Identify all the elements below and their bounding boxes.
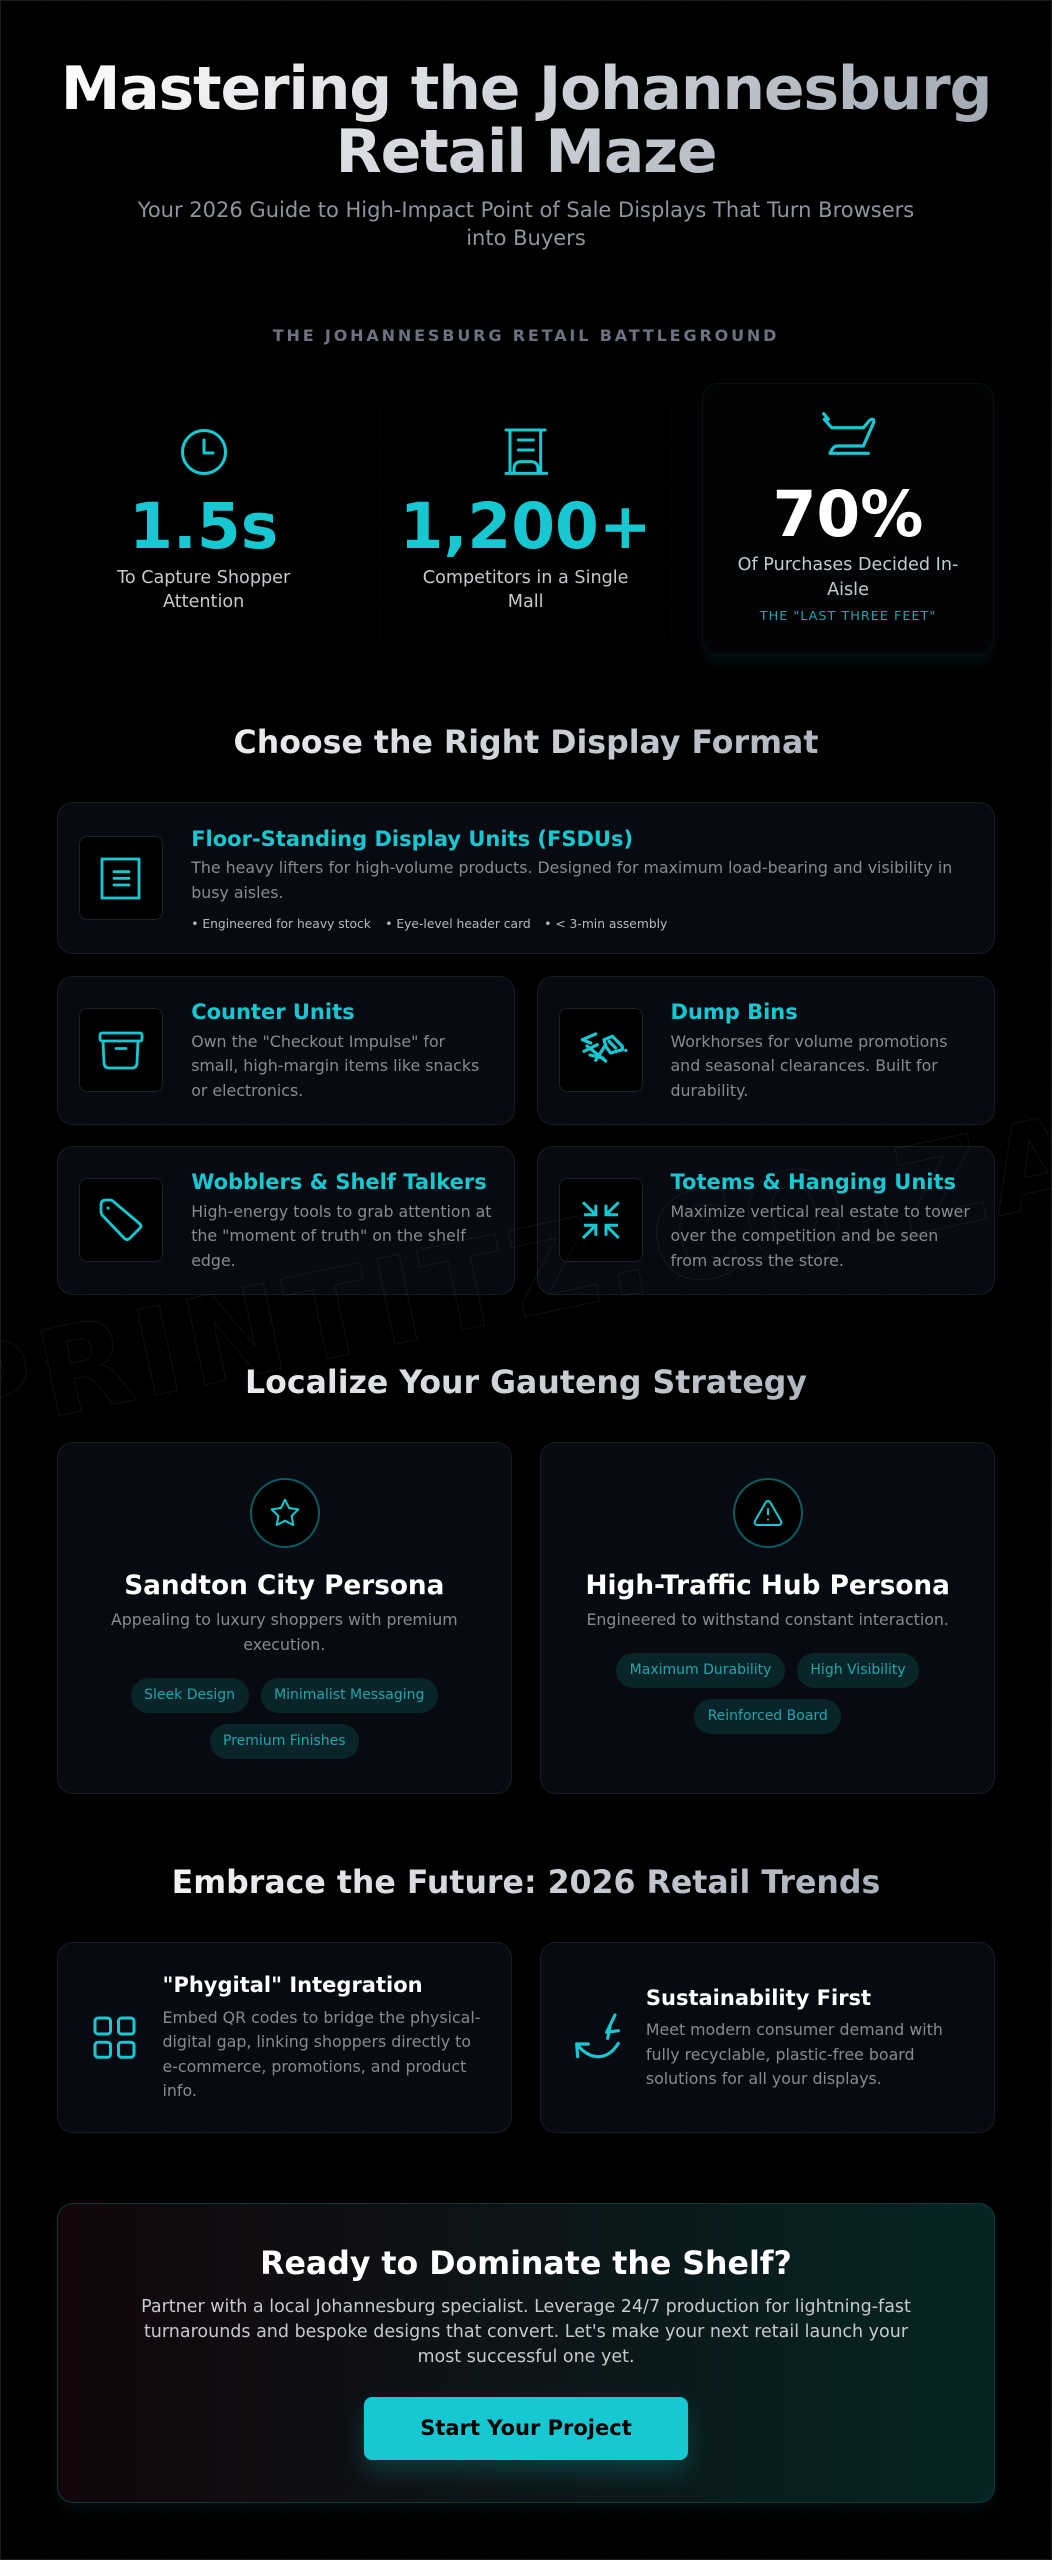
panel: stat 1,200+ [379,383,672,655]
card text [162,2008,480,2100]
persona text: Appealing to luxury shoppers with premium [111,1610,458,1629]
icon: shopping basket [822,412,876,455]
card text: from across the store. [670,1251,844,1270]
title [57,58,995,184]
panel: totems [536,1146,994,1294]
tags row 2: Premium Finishes [223,1733,346,1749]
tags row 1: Sleek Design [144,1687,235,1703]
persona title: Sandton City Persona [124,1570,444,1600]
feature bullets [191,917,667,931]
panel: stat 1.5s [57,383,350,655]
cta button: Start Your Project [420,2416,632,2440]
cta text: Partner with a local Johannesburg specialist. Leverage 24/7 production for lightning-fast [141,2297,911,2317]
card text: edge. [191,1251,236,1270]
card title: Sustainability First [646,1986,871,2010]
subtitle [138,198,914,250]
card text: Own the "Checkout Impulse" for [191,1032,445,1051]
persona text [111,1610,458,1654]
tags row 1: High Visibility [810,1662,906,1678]
card text: e-commerce, promotions, and product [162,2057,466,2076]
stat label: Mall [508,592,544,612]
card text: durability. [670,1081,748,1100]
cta text: turnarounds and bespoke designs that convert. Let's make your next retail launch your [144,2322,908,2342]
persona title: High-Traffic Hub Persona [585,1570,950,1600]
cta button [364,2397,688,2460]
card text: busy aisles. [191,883,284,902]
card title: Wobblers & Shelf Talkers [191,1170,487,1194]
stat label [738,555,958,600]
cta text [141,2297,911,2367]
icon: document display [79,836,163,920]
stat label [423,568,628,612]
card title: Totems & Hanging Units [670,1170,956,1194]
subtitle: Your 2026 Guide to High-Impact Point of Sale Displays That Turn Browsers [138,198,914,222]
section label: battleground: THE JOHANNESBURG RETAIL BATTLEGROUND [273,326,779,345]
icon: warning badge [733,1478,803,1548]
heading: display format: Choose the Right Display Format [234,725,818,761]
heading: trends [57,1863,995,1903]
panel: counter units [57,976,515,1124]
card text: small, high-margin items like snacks [191,1056,479,1075]
icon: recycle arrow [575,2013,620,2058]
title: Retail Maze [336,117,716,187]
tags row 1: Maximum Durability [630,1662,771,1678]
icon: clock [181,429,227,475]
card text: the "moment of truth" on the shelf [191,1226,466,1245]
card text: over the competition and be seen [670,1226,938,1245]
stat label: Of Purchases Decided In- [738,555,958,575]
cta heading: Ready to Dominate the Shelf? [260,2246,792,2282]
card text: info. [162,2081,197,2100]
stat label: Attention [163,592,244,612]
subtitle: into Buyers [466,226,586,250]
persona text: execution. [243,1635,325,1654]
panel: high-traffic persona [540,1442,995,1794]
feature bullets: • Eye-level header card [385,917,531,931]
feature bullets: • Engineered for heavy stock [191,917,371,931]
heading: display format [57,723,995,763]
panel: wobblers [57,1146,515,1294]
panel: Sandton City persona [57,1442,512,1794]
card text: Workhorses for volume promotions [670,1032,948,1051]
stat number: 1,200+ [400,490,652,563]
persona text: Engineered to withstand constant interaction. [586,1610,949,1629]
card text: The heavy lifters for high-volume products. Designed for maximum load-bearing and visibility in [191,858,952,877]
icon: four-square grid [94,2016,136,2059]
card text [191,1032,479,1100]
panel: call to action [57,2203,995,2502]
cta text: most successful one yet. [417,2347,635,2367]
card title: Dump Bins [670,1000,798,1024]
card text: Meet modern consumer demand with [646,2020,943,2039]
tags row 1 [616,1653,919,1688]
icon: inward arrows [558,1178,642,1262]
stat tag: THE "LAST THREE FEET" [760,609,936,624]
panel: phygital [57,1942,512,2132]
stat number: 1.5s [129,490,278,563]
panel: stat 70% highlighted [702,383,994,655]
card title: Floor-Standing Display Units (FSDUs) [191,827,633,851]
card text [670,1032,948,1100]
stat label: Aisle [827,580,869,600]
stat label: Competitors in a Single [423,568,628,588]
icon: dump bin [558,1008,642,1092]
panel: floor-standing display units [57,802,995,954]
card text: Maximize vertical real estate to tower [670,1202,970,1221]
heading: strategy [57,1363,995,1403]
title: Mastering the Johannesburg [61,54,991,124]
feature bullets: • < 3-min assembly [544,917,667,931]
panel: sustainability [540,1942,995,2132]
card text: Embed QR codes to bridge the physical- [162,2008,480,2027]
card title: "Phygital" Integration [162,1973,423,1997]
card text: or electronics. [191,1081,303,1100]
panel: dump bins [536,976,994,1124]
icon: price tag [79,1178,163,1262]
card text [191,858,952,902]
icon: archive box [79,1008,163,1092]
card text [646,2020,943,2088]
card text: High-energy tools to grab attention at [191,1202,492,1221]
stat label [117,568,290,612]
tags row 1: Minimalist Messaging [274,1687,424,1703]
icon: star badge [250,1478,320,1548]
heading: strategy: Localize Your Gauteng Strategy [245,1365,807,1401]
card text: digital gap, linking shoppers directly to [162,2032,471,2051]
card text [670,1202,970,1270]
icon: display unit [504,428,548,475]
card text: solutions for all your displays. [646,2069,882,2088]
heading: trends: Embrace the Future: 2026 Retail Trends [172,1865,880,1901]
tags row 1 [131,1678,438,1713]
tags row 2: Reinforced Board [708,1708,828,1724]
card text: and seasonal clearances. Built for [670,1056,938,1075]
stat label: To Capture Shopper [117,568,290,588]
stat number: 70% [773,478,923,551]
card title: Counter Units [191,1000,355,1024]
card text [191,1202,492,1270]
card text: fully recyclable, plastic-free board [646,2044,915,2064]
